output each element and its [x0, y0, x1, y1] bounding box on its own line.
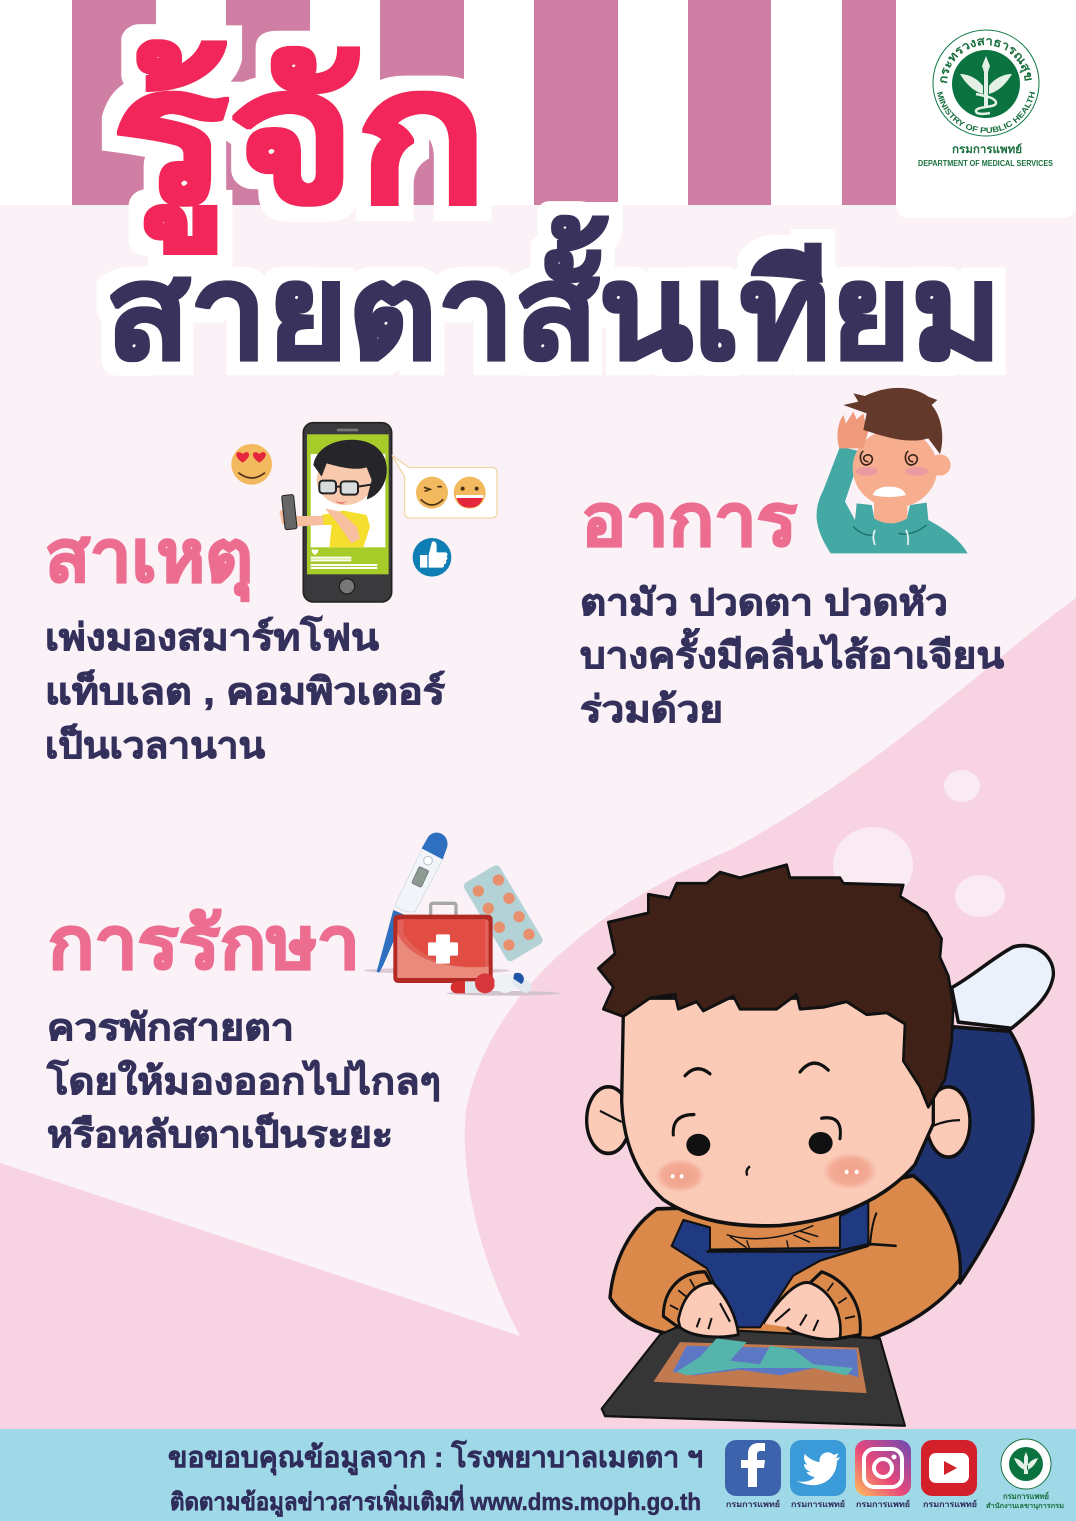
text block: treatment: โดยให้มองออกไปไกลๆ — [46, 1059, 441, 1102]
hair — [598, 865, 953, 1107]
tablet — [602, 1327, 905, 1426]
footer band — [0, 1429, 1076, 1521]
left ear — [587, 1087, 630, 1153]
hair — [843, 388, 942, 454]
text block: causes: เพ่งมองสมาร์ทโฟน — [45, 615, 379, 658]
heading: symptoms: อาการ — [581, 481, 797, 561]
icon: heart-eyes emoji — [231, 444, 272, 485]
text block: treatment — [46, 1007, 441, 1155]
text block: treatment: หรือหลับตาเป็นระยะ — [47, 1111, 393, 1155]
panel: treatment — [46, 904, 441, 1155]
icon: youtube — [921, 1440, 977, 1509]
decorative bubbles — [833, 770, 1005, 917]
panel: symptoms — [580, 481, 1004, 730]
text block: symptoms: ตามัว ปวดตา ปวดหัว — [580, 582, 948, 623]
title: line two: สายตาสั้นเทียม — [106, 215, 1002, 386]
icon: facebook: กรมการแพทย์ — [726, 1499, 780, 1509]
cheeks — [655, 1153, 877, 1192]
icon: twitter — [790, 1440, 846, 1509]
speech bubble with emojis — [392, 455, 497, 518]
collar stitches — [727, 1226, 818, 1250]
icon: footer ministry logo: สำนักงานเลขานุการกรม — [986, 1502, 1064, 1510]
kit case — [393, 903, 493, 983]
sweater — [610, 1176, 960, 1342]
thermometer — [377, 833, 448, 973]
neck — [874, 500, 907, 523]
icon: youtube: กรมการแพทย์ — [923, 1499, 977, 1509]
sock — [952, 946, 1053, 1028]
eyes and brows — [673, 1063, 840, 1176]
title: line one: รู้จัก — [112, 31, 488, 253]
pink wave background — [0, 598, 1076, 1429]
icon: medical kit, thermometer and pills — [363, 833, 560, 996]
logo panel: Ministry of Public Health — [896, 30, 1076, 218]
right ear — [927, 1087, 970, 1157]
icon: thumbs-up badge — [413, 538, 451, 577]
boy in phone — [322, 511, 370, 547]
icon: facebook — [725, 1440, 781, 1509]
phone body — [303, 423, 392, 602]
logo panel: Ministry of Public Health: DEPARTMENT OF MEDICAL SERVICES — [918, 159, 1054, 168]
icon: dizzy boy — [817, 388, 968, 553]
overalls bib — [672, 1202, 868, 1327]
logo panel: Ministry of Public Health: กรมการแพทย์ — [952, 143, 1022, 156]
striped header band — [72, 0, 896, 205]
footer credits: ติดตามข้อมูลข่าวสารเพิ่มเติมที่ www.dms.moph.go.th — [170, 1484, 701, 1517]
footer credits: ขอขอบคุณข้อมูลจาก : โรงพยาบาลเมตตา ฯ — [168, 1439, 703, 1475]
icon: footer ministry logo — [986, 1439, 1064, 1510]
ear — [929, 454, 951, 476]
icon: twitter: กรมการแพทย์ — [791, 1499, 845, 1509]
icon: footer ministry logo: กรมการแพทย์ — [1003, 1491, 1049, 1501]
heading: causes: สาเหตุ — [45, 517, 253, 602]
text block: causes: แท็บเลต , คอมพิวเตอร์ — [45, 668, 445, 712]
illustration: boy on tablet — [587, 865, 1053, 1426]
cuffs and hands — [663, 1272, 860, 1339]
logo panel: Ministry of Public Health: MINISTRY OF PUBLIC HEALTH — [936, 92, 1035, 133]
pills — [451, 973, 534, 995]
hoodie — [817, 447, 968, 553]
icon: phone with boy and emojis — [231, 423, 497, 602]
text block: treatment: ควรพักสายตา — [47, 1007, 294, 1048]
icon: instagram — [855, 1440, 911, 1509]
hand — [838, 412, 872, 448]
text block: symptoms: บางครั้งมีคลื่นไส้อาเจียน — [580, 628, 1004, 676]
text block: causes — [45, 615, 445, 766]
footer credits — [168, 1439, 703, 1517]
text block: symptoms: ร่วมด้วย — [580, 689, 723, 730]
logo panel: Ministry of Public Health: กระทรวงสาธารณสุข — [940, 38, 1032, 84]
heading: treatment: การรักษา — [48, 904, 360, 984]
head — [853, 429, 937, 508]
blister pack — [462, 864, 544, 963]
text block: symptoms — [580, 582, 1004, 730]
text block: causes: เป็นเวลานาน — [45, 722, 265, 766]
icon: instagram: กรมการแพทย์ — [856, 1499, 910, 1509]
face — [622, 998, 933, 1226]
trousers — [900, 1027, 1033, 1283]
panel: causes — [45, 517, 445, 766]
